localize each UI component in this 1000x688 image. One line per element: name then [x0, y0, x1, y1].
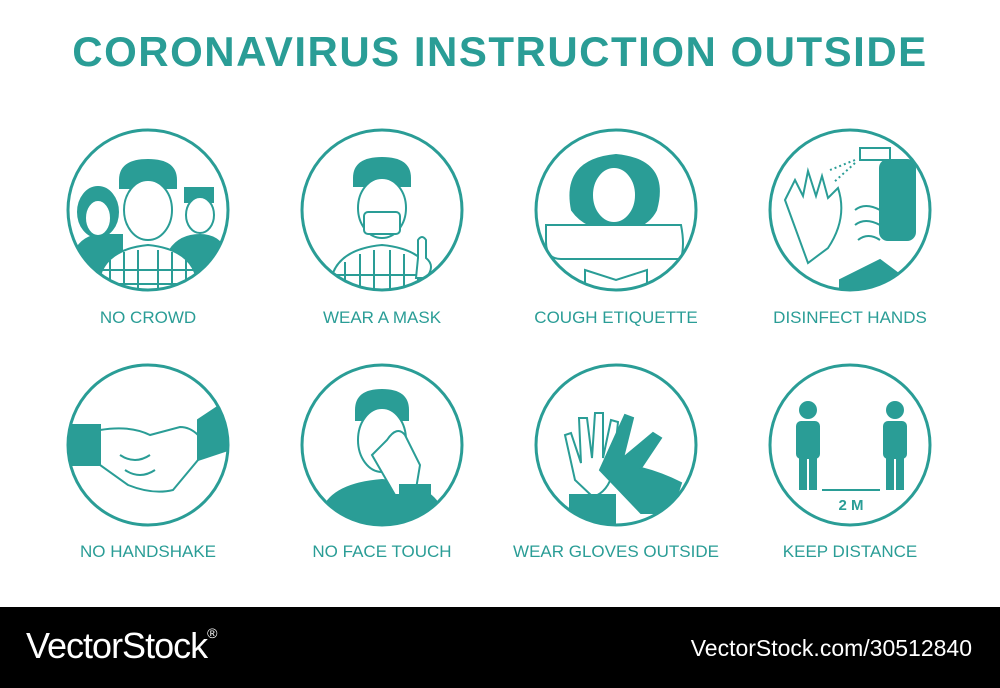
- label: cough etiquette: COUGH ETIQUETTE: [534, 308, 698, 327]
- icon: no crowd: [68, 130, 230, 305]
- label: no handshake: NO HANDSHAKE: [80, 542, 216, 561]
- icon: disinfect hands: [770, 130, 930, 310]
- title: CORONAVIRUS INSTRUCTION OUTSIDE: [72, 28, 928, 75]
- label: keep distance: KEEP DISTANCE: [783, 542, 917, 561]
- icon: keep distance: [770, 365, 930, 525]
- icon: no face touch: [302, 365, 462, 525]
- label: no face touch: NO FACE TOUCH: [312, 542, 452, 561]
- icon: wear gloves: [536, 365, 696, 525]
- label: disinfect hands: DISINFECT HANDS: [773, 308, 927, 327]
- icon: wear a mask: [302, 130, 462, 302]
- footer: [0, 607, 1000, 688]
- footer brand: VectorStock®: [26, 625, 216, 666]
- icon: cough etiquette: [536, 130, 696, 300]
- label: no crowd: NO CROWD: [100, 308, 196, 327]
- label: wear a mask: WEAR A MASK: [323, 308, 441, 327]
- label: wear gloves outside: WEAR GLOVES OUTSIDE: [513, 542, 719, 561]
- footer url: VectorStock.com/30512840: [691, 635, 972, 661]
- icon: keep distance: 2 M: [838, 497, 864, 514]
- icon: no handshake: [60, 365, 228, 525]
